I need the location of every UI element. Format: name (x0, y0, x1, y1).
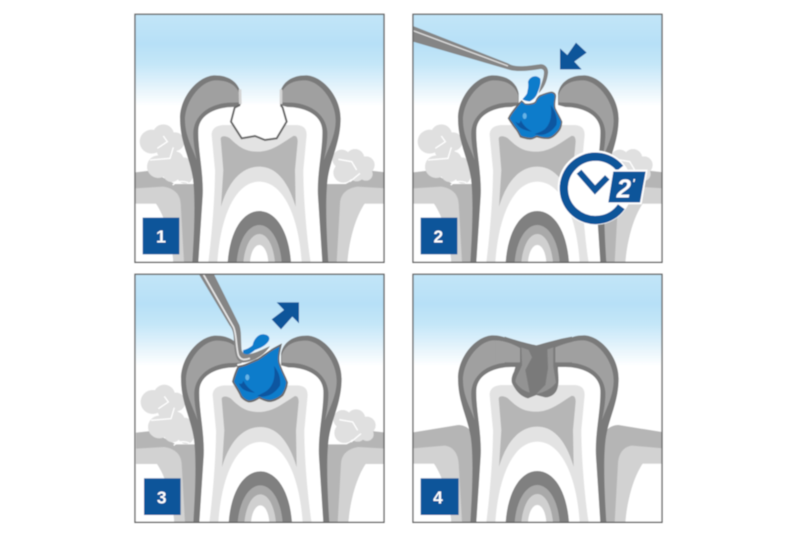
step number 4: 4 (433, 487, 443, 507)
panel 3: removing excess material (135, 274, 387, 523)
step number 1 (143, 218, 179, 254)
instrument (413, 26, 548, 93)
clock icon: 2 minutes: 2 (616, 173, 632, 203)
blue material in cavity (232, 343, 288, 402)
arrow pointing into tooth (560, 43, 587, 69)
instrument (199, 274, 270, 363)
step number 1: 1 (156, 227, 166, 247)
blue material on instrument (522, 76, 541, 101)
panel 1: prepared cavity (135, 14, 386, 262)
cavity outline (231, 89, 287, 140)
blue excess on instrument (243, 334, 269, 355)
restored filling (504, 336, 572, 399)
arrow pointing away from tooth (272, 302, 299, 329)
clock icon: 2 minutes: ' (632, 176, 636, 190)
panel 4: finished restoration (413, 274, 664, 522)
step number 4 (421, 478, 459, 515)
step number 2 (421, 218, 457, 254)
clock icon: 2 minutes (558, 150, 648, 225)
step number 3: 3 (157, 487, 167, 507)
step number 3 (144, 478, 181, 515)
blue material in cavity (508, 92, 562, 140)
panel 2: applying blue material (413, 14, 664, 262)
step number 2: 2 (434, 227, 443, 247)
